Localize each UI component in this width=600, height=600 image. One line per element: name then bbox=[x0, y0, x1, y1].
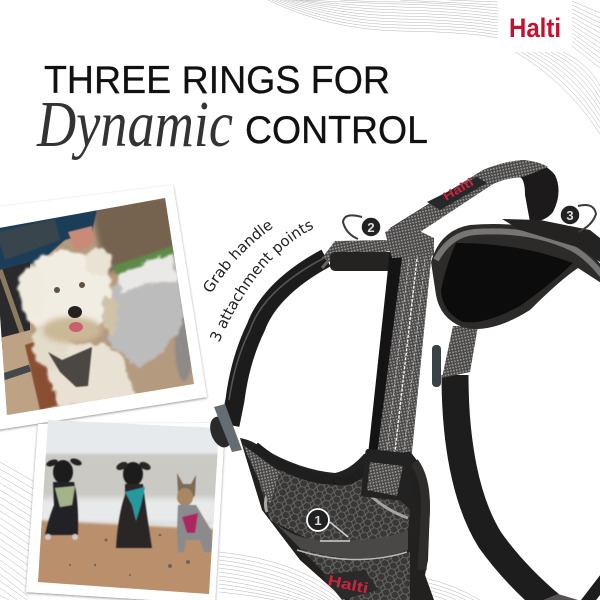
logo: Halti: Halti bbox=[509, 13, 561, 43]
grab handle bbox=[388, 160, 559, 240]
photo: old english sheepdog bbox=[0, 185, 210, 431]
title bbox=[36, 59, 428, 161]
curved caption: 3 attachment points: 3 attachment points bbox=[210, 222, 313, 342]
right top webbing bbox=[502, 219, 600, 262]
logo: Halti bbox=[498, 0, 572, 50]
badge 3 with ring: 3 bbox=[566, 208, 574, 223]
right dog bbox=[177, 473, 212, 552]
harness product bbox=[206, 160, 600, 600]
left buckle bbox=[206, 404, 242, 452]
chest logo: Halti bbox=[326, 572, 370, 597]
handle logo tag bbox=[427, 175, 487, 210]
right long strap bbox=[455, 375, 552, 600]
title: Dynamic bbox=[36, 88, 233, 161]
under strap webbing bbox=[442, 326, 478, 378]
left curved strap bbox=[230, 258, 326, 425]
left dog bbox=[45, 457, 83, 540]
badge 3 with ring bbox=[560, 205, 596, 232]
title: THREE RINGS FOR bbox=[44, 59, 390, 102]
handle logo tag: Halti bbox=[440, 175, 476, 204]
badge 1 bbox=[307, 509, 329, 531]
central reflective strap bbox=[368, 224, 434, 462]
back pad bbox=[431, 224, 600, 329]
d-ring at point 1 bbox=[320, 522, 350, 541]
curved caption: Grab handle: Grab handle bbox=[204, 222, 273, 292]
photo: three dogs on beach bbox=[26, 415, 230, 600]
chest plate bbox=[240, 438, 434, 600]
badge 1: 1 bbox=[314, 513, 322, 528]
chest slider buckle bbox=[361, 449, 413, 501]
top side strap with d-ring 2 bbox=[322, 240, 395, 262]
middle dog bbox=[115, 460, 152, 548]
chest logo bbox=[322, 570, 378, 600]
badge 2 with ring: 2 bbox=[367, 220, 375, 235]
badge 2 with ring bbox=[343, 215, 381, 239]
title: CONTROL bbox=[245, 109, 428, 152]
